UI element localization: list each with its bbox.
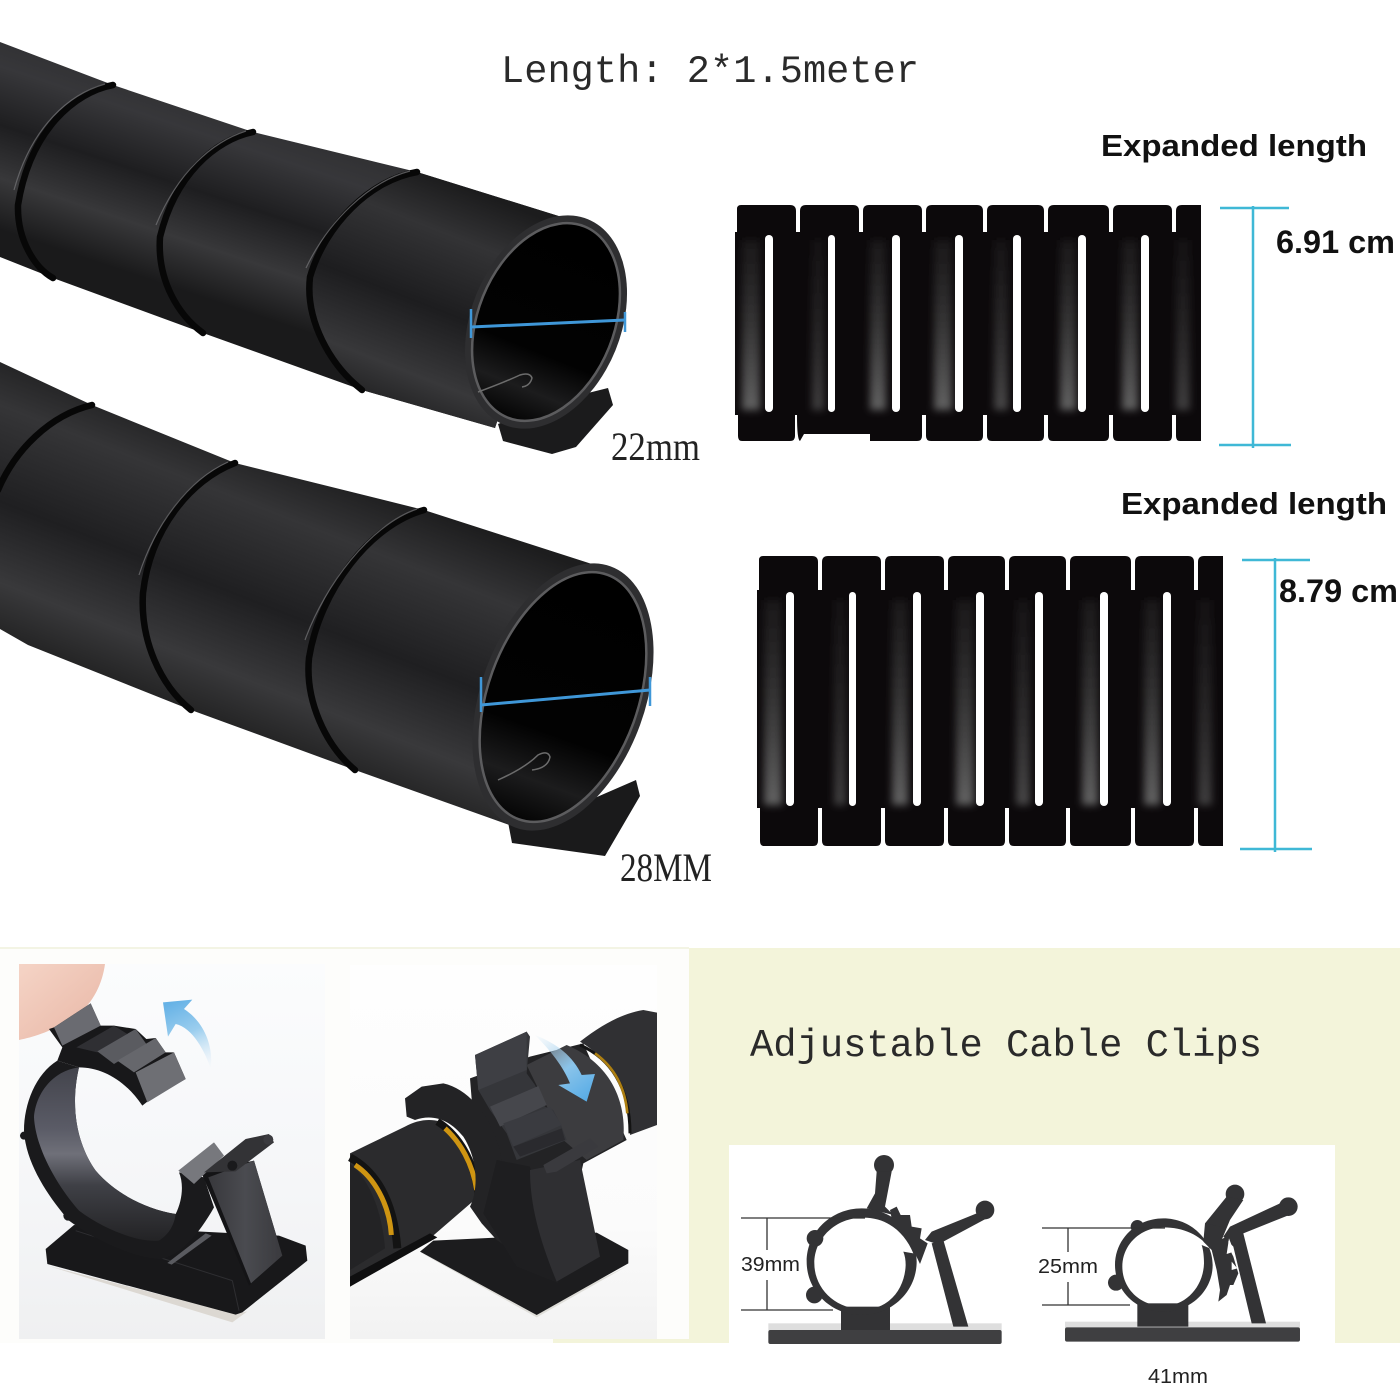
panel background: [689, 948, 1400, 1343]
blue arrow up: [163, 1000, 211, 1069]
pale top rule: [0, 947, 689, 949]
label 6.91 cm: 6.91 cm: [1276, 224, 1395, 260]
bottom left background: [0, 948, 689, 1343]
label 41mm: 41mm: [1148, 1366, 1208, 1388]
strip body: [757, 556, 1223, 846]
tube body: [0, 362, 595, 826]
photo card: closed clip on cable: [350, 965, 657, 1339]
inner curl: [498, 753, 550, 780]
base: [1065, 1322, 1300, 1328]
clip post plate: [202, 1161, 282, 1286]
cable far segment: [350, 1164, 385, 1270]
label 8.79 cm: 8.79 cm: [1279, 573, 1398, 609]
finger: [19, 964, 105, 1040]
clip strut: [167, 1233, 212, 1265]
cable strap: [350, 1233, 437, 1287]
toothed arm: [1203, 1223, 1238, 1302]
tube front segment: [309, 172, 565, 428]
clip ring: [405, 1083, 503, 1223]
right arm: [976, 1201, 994, 1219]
clip base: [420, 1233, 628, 1315]
pedestal: [841, 1307, 890, 1330]
title: length: Length: 2*1.5meter: [501, 50, 919, 94]
clip latch: [543, 1138, 598, 1173]
sticky tape: [421, 1253, 627, 1317]
blue arrow down: [535, 1035, 595, 1102]
photo card: opening clip: [19, 964, 325, 1339]
cable middle: [527, 1045, 624, 1160]
panel: adjustable cable clips: [689, 948, 1400, 1343]
label 28MM: 28MM: [620, 845, 712, 890]
card background: [350, 965, 657, 1339]
expanded strip 6.91 cm: [735, 205, 1201, 441]
strip slots: [765, 235, 1149, 412]
bumps: [807, 1230, 823, 1247]
clip shape: [1065, 1185, 1300, 1342]
tube mouth: [438, 538, 688, 856]
pedestal: [1137, 1303, 1188, 1327]
clip latch: [204, 1134, 274, 1172]
sticky tape: [47, 1266, 247, 1322]
clip ring rim: [24, 1061, 214, 1259]
strip highlights: [742, 240, 1190, 410]
strip highlights: [764, 600, 1212, 805]
clip teeth: [475, 1032, 567, 1160]
leg: [932, 1240, 968, 1327]
ring: [807, 1208, 917, 1315]
heading: expanded length 2: Expanded length: [1121, 486, 1387, 521]
strip body: [735, 205, 1201, 441]
clip body: [483, 1160, 558, 1283]
pale strip under card: [553, 1339, 689, 1343]
mouth flap: [498, 388, 613, 454]
clip diagram 39mm: [741, 1155, 1002, 1344]
tube mouth: [435, 191, 657, 453]
clip post: [530, 1160, 600, 1282]
right arm and leg: [1279, 1197, 1298, 1216]
diameter line: [481, 677, 650, 712]
cable left: [350, 1120, 478, 1287]
cable sleeve 22mm: [0, 42, 657, 454]
label 39mm: 39mm: [741, 1254, 800, 1276]
clip diagram 25mm: [1038, 1185, 1300, 1342]
cable sleeve 28mm: [0, 362, 688, 856]
heading: expanded length 1: Expanded length: [1101, 128, 1367, 163]
amber ring far: [350, 1157, 397, 1248]
clip and cable drawing: [350, 1010, 657, 1317]
clip base: [46, 1225, 307, 1315]
clip arm underside: [49, 1003, 186, 1106]
teeth: [890, 1207, 928, 1264]
dimension line 8.79 cm: [1240, 558, 1312, 852]
amber ring near: [437, 1122, 478, 1195]
dimension lines: [1042, 1228, 1165, 1305]
white diagram area: [729, 1145, 1335, 1343]
dimension line 6.91 cm: [1219, 206, 1291, 448]
clip bumps: [20, 1132, 28, 1140]
base: [768, 1323, 1002, 1331]
tooth gaps: [1227, 1238, 1237, 1270]
panel heading: Adjustable Cable Clips: [750, 1024, 1262, 1068]
stem with ball: [874, 1155, 894, 1175]
dark filler behind clip: [470, 1043, 627, 1282]
clip teeth: [54, 1003, 186, 1102]
inner curl: [478, 374, 532, 392]
cable right: [580, 1010, 657, 1135]
card background: [19, 964, 325, 1339]
label 25mm: 25mm: [1038, 1256, 1098, 1278]
bumps: [1131, 1220, 1144, 1233]
clip shape: [768, 1155, 1002, 1344]
strip slots: [786, 592, 1171, 806]
clip tab: [178, 1142, 224, 1184]
amber ring right: [580, 1045, 630, 1133]
diameter line: [471, 309, 625, 338]
spiral seams: [0, 405, 424, 770]
dimension lines: [741, 1218, 865, 1310]
ring: [1115, 1218, 1213, 1312]
tube body: [0, 42, 565, 428]
spiral seams: [18, 85, 417, 390]
label 22mm: 22mm: [611, 424, 700, 469]
stem with ball: [1226, 1185, 1244, 1203]
expanded strip 8.79 cm: [757, 556, 1223, 846]
clip band inner face: [34, 1067, 176, 1241]
mouth flap: [508, 780, 640, 856]
